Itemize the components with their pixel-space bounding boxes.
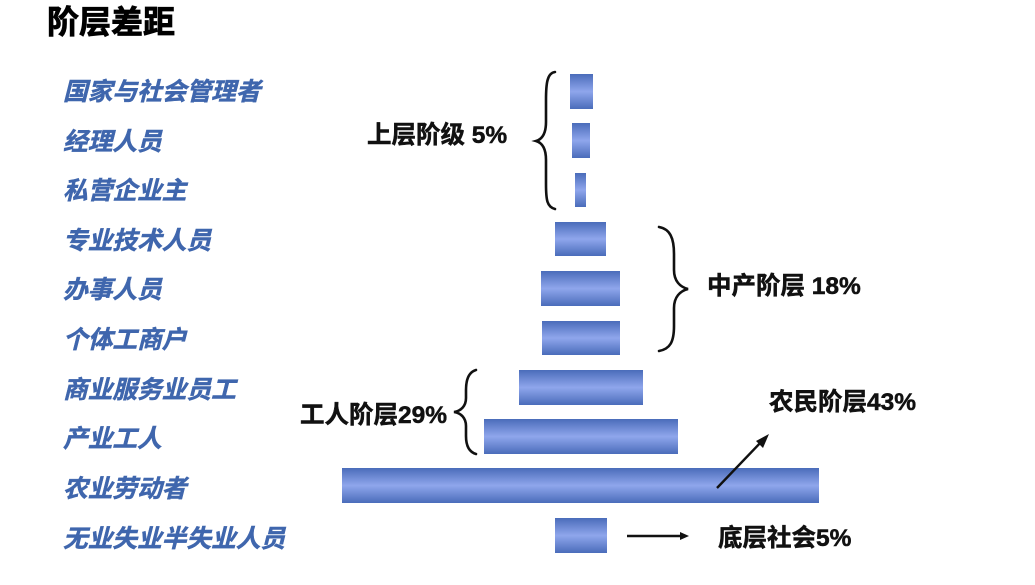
bar: 国家与社会管理者 bbox=[570, 74, 593, 109]
brace: working class bbox=[454, 370, 476, 454]
label: 产业工人: 产业工人 bbox=[63, 425, 162, 453]
bar: 个体工商户 bbox=[542, 321, 620, 355]
bar: 产业工人 bbox=[484, 419, 678, 454]
bar: 专业技术人员 bbox=[555, 222, 606, 256]
pyramid bar chart bbox=[342, 74, 819, 553]
bar: 商业服务业员工 bbox=[519, 370, 643, 405]
label: 商业服务业员工: 商业服务业员工 bbox=[63, 376, 238, 404]
bar: 办事人员 bbox=[541, 271, 620, 306]
label: 私营企业主: 私营企业主 bbox=[63, 177, 189, 205]
label: 办事人员: 办事人员 bbox=[63, 277, 163, 304]
brace: upper class bbox=[536, 72, 555, 209]
caption: upper class: 上层阶级 5% bbox=[367, 121, 507, 149]
caption: working class: 工人阶层29% bbox=[300, 401, 447, 429]
caption: bottom society: 底层社会5% bbox=[718, 524, 852, 552]
caption: middle class: 中产阶层 18% bbox=[707, 272, 861, 300]
label: 个体工商户: 个体工商户 bbox=[63, 326, 188, 354]
title: 阶层差距 bbox=[47, 4, 175, 40]
label: 无业失业半失业人员: 无业失业半失业人员 bbox=[63, 526, 287, 553]
caption: peasant class: 农民阶层43% bbox=[769, 388, 916, 416]
bar: 经理人员 bbox=[572, 123, 590, 158]
bar: 私营企业主 bbox=[575, 173, 586, 207]
label: 经理人员: 经理人员 bbox=[63, 128, 163, 156]
arrow: to peasant class bbox=[717, 434, 769, 488]
arrow: to bottom society bbox=[627, 532, 689, 540]
label: 专业技术人员: 专业技术人员 bbox=[63, 227, 212, 255]
label: 农业劳动者: 农业劳动者 bbox=[63, 476, 190, 503]
occupation labels bbox=[63, 78, 287, 553]
bar: 农业劳动者 bbox=[342, 468, 819, 503]
label: 国家与社会管理者: 国家与社会管理者 bbox=[63, 78, 264, 106]
brace: middle class bbox=[659, 227, 688, 351]
bar: 无业失业半失业人员 bbox=[555, 518, 607, 553]
